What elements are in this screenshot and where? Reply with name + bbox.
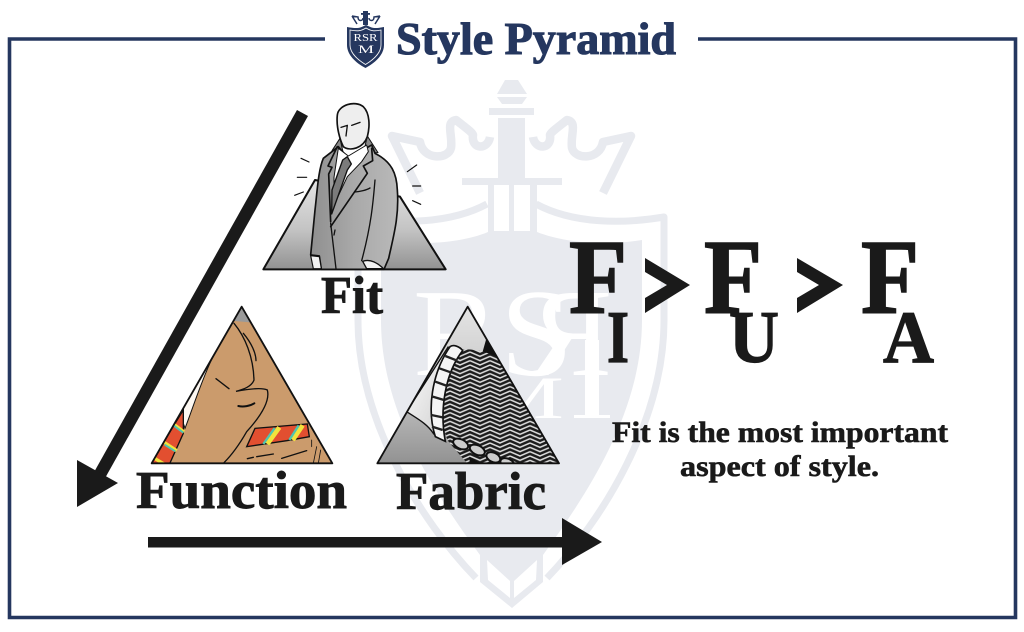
letters: F U: F xyxy=(704,218,762,336)
panel: function triangle with pocket square xyxy=(148,303,332,467)
icon: greater-than chevron one xyxy=(645,258,690,313)
icon: greater-than chevron two xyxy=(797,258,843,313)
logo: crest: RSR xyxy=(354,32,378,44)
letters: F A: A xyxy=(883,297,934,379)
arrow: horizontal from function to fabric xyxy=(148,518,602,565)
watermark: RSRM shield crest: M xyxy=(478,365,564,431)
letters: F I: F xyxy=(569,218,627,336)
watermark: RSRM shield crest: R xyxy=(528,265,612,403)
logo: crest: M xyxy=(358,42,374,56)
arrow: diagonal from fit to function xyxy=(77,110,308,507)
caption: Fit is the most important xyxy=(612,416,948,449)
title: Style Pyramid xyxy=(396,14,676,64)
label: Fit: Fit xyxy=(321,267,383,325)
formula: FIT greater than FUNCTION greater than FABRIC xyxy=(569,218,934,379)
panel: fabric triangle with herringbone jacket xyxy=(377,307,563,471)
letters: F A xyxy=(861,218,934,379)
letters: F I xyxy=(569,218,629,379)
letters: F I: I xyxy=(607,297,629,379)
caption: aspect of style. xyxy=(680,450,879,483)
watermark: RSRM shield crest xyxy=(358,80,664,608)
label: Fabric: Fabric xyxy=(396,463,546,521)
letters: F U: U xyxy=(729,297,779,379)
label: Function: Function xyxy=(136,462,347,520)
letters: F U xyxy=(704,218,779,379)
logo: crest xyxy=(347,11,384,68)
watermark: RSRM shield crest: RS xyxy=(413,265,573,403)
icon: suited man xyxy=(295,104,421,269)
panel: fit triangle with suited man xyxy=(263,104,446,269)
letters: F A: F xyxy=(861,218,919,336)
caption xyxy=(612,416,948,483)
